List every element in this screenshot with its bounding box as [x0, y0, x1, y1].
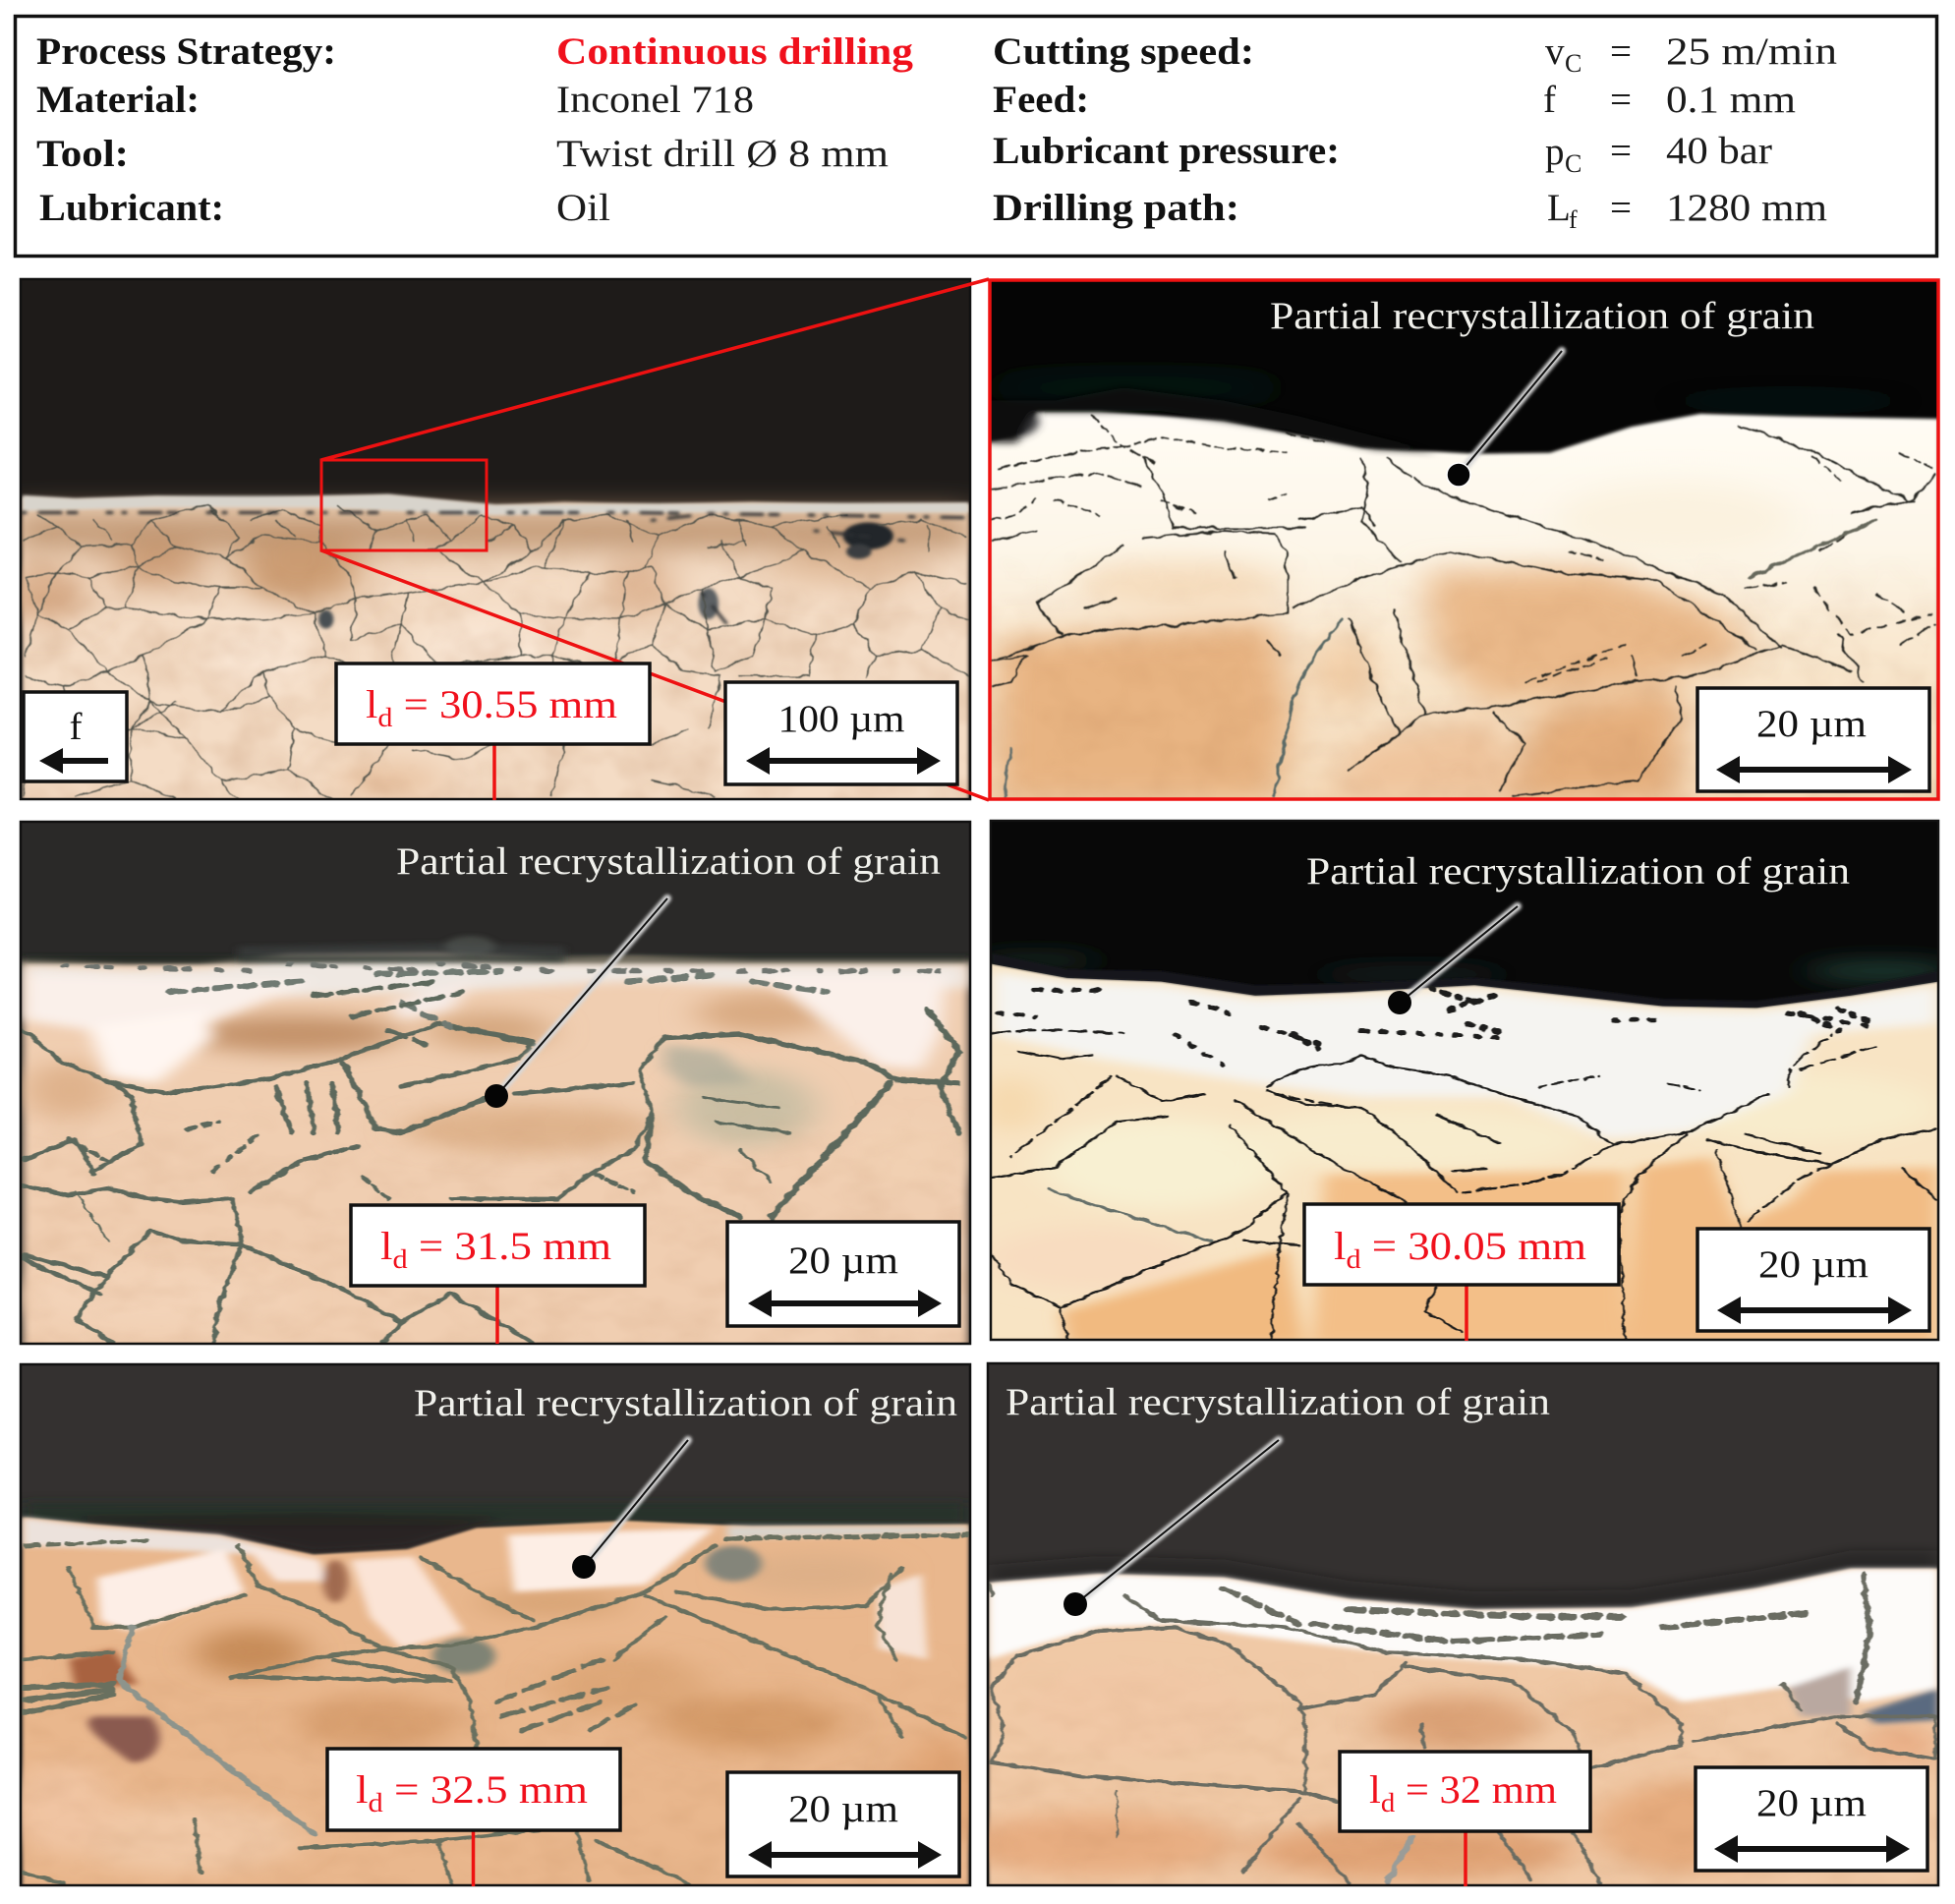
- parameter labels, right column: [993, 30, 1340, 229]
- drilling depth label: [1304, 1204, 1619, 1341]
- scale bar: 20 µm: 20 µm: [1756, 703, 1867, 745]
- drilling depth label: = 30.55 mm: [392, 682, 617, 726]
- callout: partial recrystallization of grain: [1270, 295, 1814, 487]
- drilling depth label: d: [1381, 1788, 1396, 1817]
- zoom indicator: red box and projection lines: [321, 279, 989, 800]
- parameter values, right column: [1666, 30, 1837, 229]
- parameter labels, left column: Process Strategy:: [36, 30, 336, 73]
- scale bar: 20 µm: [1697, 688, 1929, 791]
- parameter labels, right column: Drilling path:: [993, 187, 1239, 229]
- callout: partial recrystallization of grain: [1006, 1381, 1550, 1616]
- scale bar: 20 µm: 20 µm: [788, 1240, 898, 1282]
- symbols and equals signs: =: [1610, 30, 1632, 73]
- drilling depth label: d: [377, 703, 393, 732]
- parameter labels, right column: Feed:: [993, 79, 1089, 121]
- parameter values, left column: Oil: [556, 187, 610, 229]
- scale bar: 100 µm: [725, 682, 957, 784]
- scale bar: 20 µm: 20 µm: [788, 1788, 898, 1830]
- symbols and equals signs: L: [1547, 187, 1571, 229]
- parameter values, right column: 0.1 mm: [1666, 79, 1796, 121]
- symbols and equals signs: =: [1610, 79, 1632, 121]
- parameter values, right column: 25 m/min: [1666, 30, 1837, 73]
- symbols and equals signs: =: [1610, 187, 1632, 229]
- parameter values, right column: 40 bar: [1666, 130, 1772, 172]
- scale bar: 20 µm: [1697, 1229, 1929, 1331]
- callout: partial recrystallization of grain: [1306, 850, 1850, 1014]
- callout: partial recrystallization of grain: Partial recrystallization of grain: [1006, 1381, 1550, 1423]
- drilling depth label: = 30.05 mm: [1361, 1224, 1586, 1268]
- callout: partial recrystallization of grain: Partial recrystallization of grain: [1306, 850, 1850, 893]
- drilling depth label: l: [1369, 1767, 1380, 1812]
- drilling depth label: l: [366, 682, 376, 726]
- micrograph: ld 32.5 mm: [13, 1363, 978, 1894]
- panel: micrograph at ld = 32.5 mm: [13, 1363, 978, 1894]
- parameter values, right column: 1280 mm: [1666, 187, 1827, 229]
- parameter values, left column: Twist drill Ø 8 mm: [556, 133, 889, 175]
- micrograph: ld 31.5 mm: [19, 821, 971, 1347]
- symbols and equals signs: f: [1569, 205, 1578, 234]
- symbols and equals signs: =: [1610, 130, 1632, 172]
- drilling depth label: [336, 664, 650, 800]
- callout: partial recrystallization of grain: [396, 840, 941, 1108]
- symbols and equals signs: p: [1545, 131, 1565, 173]
- scale bar: 20 µm: [727, 1772, 959, 1876]
- drilling depth label: [327, 1749, 620, 1886]
- callout: partial recrystallization of grain: Partial recrystallization of grain: [1270, 295, 1814, 337]
- drilling depth label: l: [380, 1224, 391, 1268]
- symbols and equals signs: C: [1565, 49, 1581, 78]
- drilling depth label: l: [1334, 1224, 1345, 1268]
- drilling depth label: d: [392, 1244, 408, 1274]
- parameter labels, right column: Lubricant pressure:: [993, 130, 1340, 172]
- red frame: [990, 280, 1938, 799]
- parameter labels, left column: Material:: [36, 79, 200, 121]
- parameter labels, left column: [36, 30, 336, 229]
- scale bar: 20 µm: 20 µm: [1758, 1243, 1869, 1286]
- panel: micrograph at ld = 31.5 mm: [19, 821, 971, 1347]
- drilling depth label: = 32 mm: [1395, 1767, 1557, 1812]
- drilling depth label: d: [369, 1788, 383, 1817]
- micrograph: magnified detail: [986, 279, 1939, 801]
- panel: micrograph at ld = 30.05 mm: [973, 820, 1955, 1343]
- drilling depth label: = 31.5 mm: [408, 1224, 611, 1268]
- symbols and equals signs: [1543, 30, 1632, 234]
- parameter values, left column: Inconel 718: [556, 79, 754, 121]
- process parameter table: [16, 16, 1936, 256]
- feed direction label: f: [69, 706, 83, 748]
- panel: micrograph at ld = 32 mm: [960, 1362, 1939, 1894]
- feed direction label: [24, 692, 127, 781]
- panel: magnified detail with red frame: [986, 279, 1939, 801]
- callout: partial recrystallization of grain: Partial recrystallization of grain: [414, 1382, 957, 1424]
- scale bar: 20 µm: [1696, 1767, 1927, 1871]
- parameter labels, left column: Lubricant:: [39, 187, 224, 229]
- drilling depth label: [1340, 1752, 1590, 1886]
- parameter labels, left column: Tool:: [36, 133, 129, 175]
- callout: partial recrystallization of grain: [414, 1382, 957, 1579]
- drilling depth label: d: [1346, 1244, 1361, 1274]
- symbols and equals signs: f: [1543, 79, 1556, 121]
- micrograph: overview: [0, 278, 972, 801]
- parameter values, left column: [556, 30, 914, 229]
- symbols and equals signs: v: [1545, 30, 1565, 73]
- parameter values, left column: Continuous drilling: [556, 30, 914, 73]
- scale bar: 20 µm: [727, 1222, 959, 1326]
- scale bar: 20 µm: 20 µm: [1756, 1782, 1867, 1824]
- symbols and equals signs: C: [1565, 149, 1581, 178]
- scale bar: 100 µm: 100 µm: [778, 698, 904, 740]
- micrograph: ld 32 mm: [960, 1362, 1939, 1894]
- micrograph: ld 30.05 mm: [973, 820, 1955, 1343]
- drilling depth label: = 32.5 mm: [383, 1767, 588, 1812]
- callout: partial recrystallization of grain: Partial recrystallization of grain: [396, 840, 941, 883]
- panel: overview micrograph, 100 µm, ld = 30.55 mm: [0, 278, 989, 801]
- drilling depth label: [351, 1205, 645, 1344]
- parameter labels, right column: Cutting speed:: [993, 30, 1254, 73]
- drilling depth label: l: [356, 1767, 367, 1812]
